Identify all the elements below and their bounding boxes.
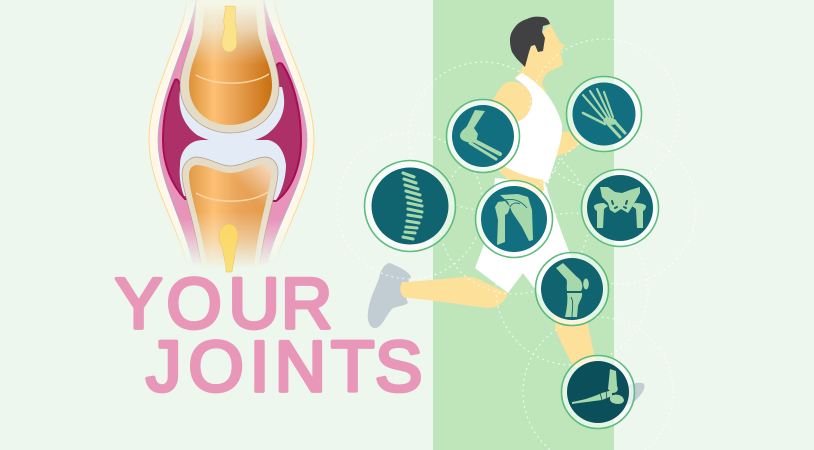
icon: foot bones [562, 356, 634, 428]
icon: elbow bone [446, 100, 520, 172]
green centre stripe [433, 0, 614, 450]
lower cartilage [180, 140, 286, 200]
joint illustration [149, 0, 314, 280]
joint capsule layers [149, 0, 314, 280]
hair [510, 17, 550, 67]
icon: pelvis [582, 170, 658, 246]
title [115, 265, 422, 407]
title line: YOUR: YOUR [115, 265, 332, 344]
front shoe [620, 383, 644, 406]
forearm [497, 162, 544, 197]
lower bone highlight [232, 165, 271, 205]
lower bone growth line [196, 192, 268, 201]
upper marrow [222, 6, 237, 52]
tank top [488, 73, 562, 183]
lower marrow [219, 224, 238, 272]
dotted orbit circles [337, 39, 696, 450]
icon: spine [364, 160, 456, 252]
icon: knee bones [536, 252, 608, 326]
title line: JOINTS: JOINTS [146, 328, 422, 407]
upper bone growth line [196, 74, 269, 83]
far arm [552, 131, 584, 158]
icon: hand bones [566, 76, 642, 152]
running man [368, 17, 644, 406]
rear leg [400, 277, 508, 308]
front lower leg [553, 314, 596, 368]
upper cartilage [179, 83, 284, 143]
shorts [475, 178, 571, 297]
neck and face [515, 24, 565, 92]
shoulder and upper arm [488, 82, 532, 128]
upper bone [180, 0, 279, 133]
icon: shoulder bones [476, 180, 552, 258]
synovial cavity [163, 63, 301, 201]
back shoe [368, 263, 411, 328]
lower bone [182, 156, 278, 266]
